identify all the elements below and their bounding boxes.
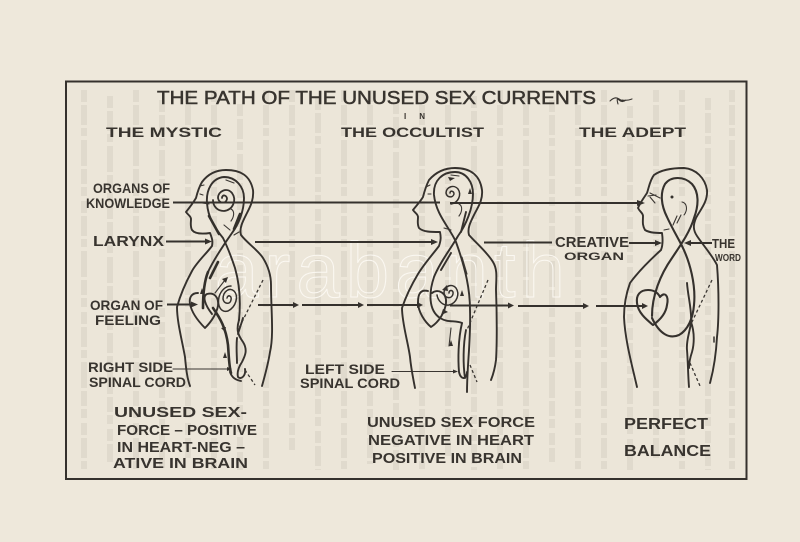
label: left side spinal cord: SPINAL CORD	[300, 375, 400, 391]
caption: adept: PERFECT	[624, 416, 708, 433]
label: organs of knowledge: KNOWLEDGE	[86, 195, 170, 211]
heart	[190, 293, 218, 328]
frame	[66, 82, 746, 479]
title: IN	[404, 112, 425, 121]
caption: mystic: ATIVE IN BRAIN	[113, 455, 248, 472]
head spiral	[446, 186, 460, 204]
caption: mystic: UNUSED SEX-	[114, 404, 247, 421]
title: THE PATH OF THE UNUSED SEX CURRENTS	[157, 88, 596, 108]
title	[157, 88, 632, 121]
label: the word: WORD	[715, 253, 741, 264]
arrows: larynx line	[166, 238, 712, 246]
label: left side spinal cord	[300, 361, 400, 391]
caption: mystic: FORCE – POSITIVE	[117, 422, 257, 439]
spiral	[218, 286, 236, 311]
figure: mystic	[177, 170, 272, 386]
caption: mystic: IN HEART-NEG –	[117, 439, 245, 456]
arrows: feeling line	[167, 302, 648, 309]
label: organ of feeling: FEELING	[95, 312, 161, 328]
figure: adept	[624, 168, 718, 387]
label: organs of knowledge: ORGANS OF	[93, 180, 170, 196]
label: organ of feeling	[90, 297, 163, 328]
caption: adept: BALANCE	[624, 443, 711, 460]
body outline	[177, 170, 272, 386]
label: organs of knowledge	[86, 180, 170, 211]
caption: adept	[624, 416, 711, 460]
current loop	[430, 172, 473, 392]
label: creative organ	[555, 235, 629, 263]
label: creative organ: ORGAN	[564, 251, 624, 263]
small marks	[426, 175, 467, 346]
label: the word	[712, 237, 741, 264]
current loop	[652, 178, 698, 336]
figure: occultist	[402, 168, 497, 392]
arrows: spinal cord leaders	[173, 367, 458, 374]
small marks	[200, 180, 239, 293]
label: right side spinal cord: RIGHT SIDE	[88, 359, 173, 375]
heart	[637, 290, 668, 325]
watermark: arabanth	[215, 226, 571, 314]
label: right side spinal cord	[88, 359, 186, 390]
label: organ of feeling: ORGAN OF	[90, 297, 163, 313]
label: creative organ: CREATIVE	[555, 235, 629, 251]
caption: occultist	[367, 415, 535, 467]
caption: occultist: UNUSED SEX FORCE	[367, 415, 535, 431]
spiral	[437, 286, 458, 305]
lower spinal strands	[230, 318, 246, 381]
heading: the adept: THE ADEPT	[579, 124, 687, 140]
arrow: knowledge line	[173, 200, 645, 206]
small marks	[648, 193, 686, 230]
caption: mystic	[113, 404, 257, 472]
body outline	[624, 168, 718, 387]
caption: occultist: NEGATIVE IN HEART	[368, 433, 534, 449]
current loop	[207, 177, 244, 320]
label: larynx: LARYNX	[93, 234, 164, 250]
head spiral	[213, 190, 234, 211]
spine	[687, 283, 694, 387]
label: the word: THE	[712, 237, 735, 251]
heading: the mystic: THE MYSTIC	[106, 124, 222, 140]
label: right side spinal cord: SPINAL CORD	[89, 374, 186, 390]
body outline	[402, 168, 497, 388]
heart	[418, 291, 446, 327]
caption: occultist: POSITIVE IN BRAIN	[372, 451, 522, 467]
heading: the occultist: THE OCCULTIST	[341, 124, 485, 140]
label: left side spinal cord: LEFT SIDE	[305, 361, 385, 377]
